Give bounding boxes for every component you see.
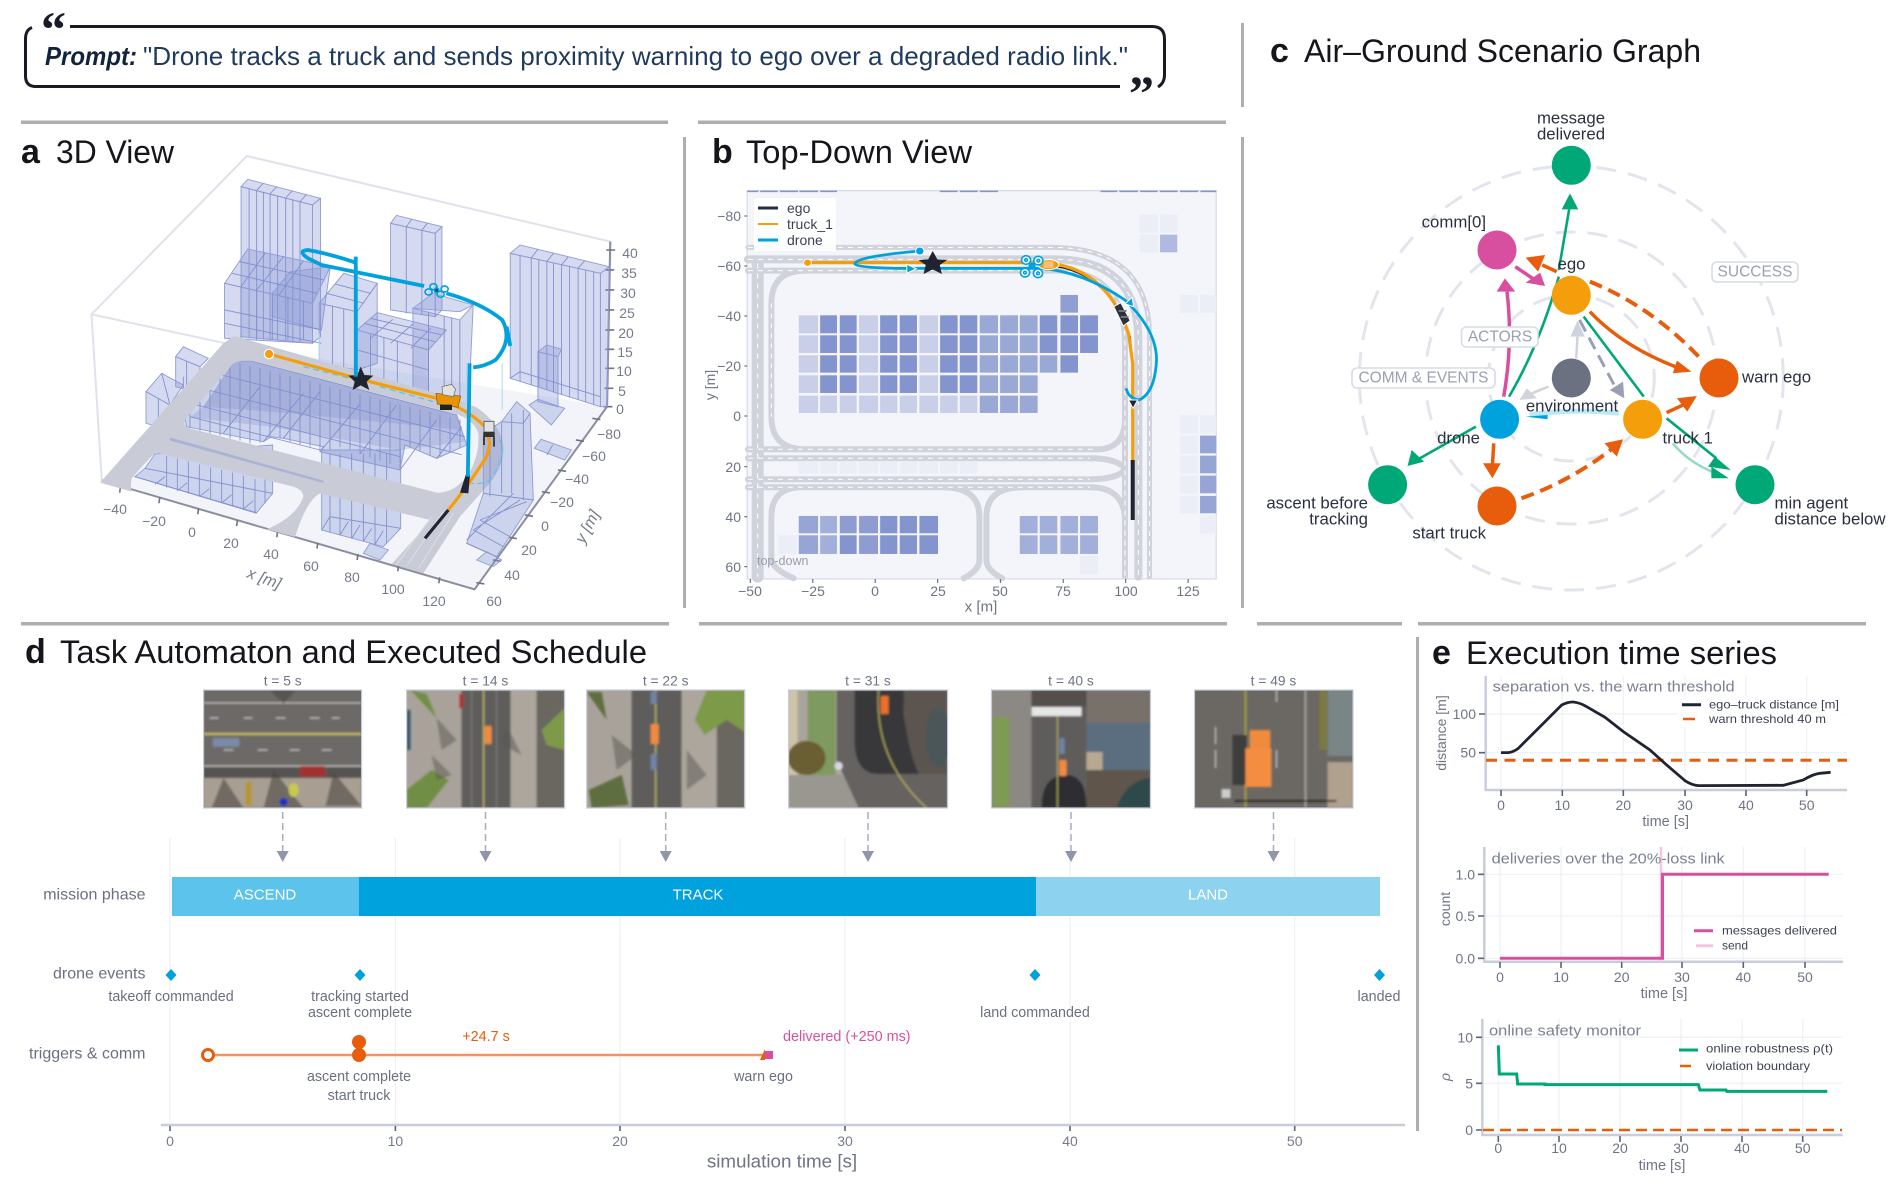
time axis: 40 [1062,1133,1078,1149]
chart: separation: 20 [1616,797,1631,813]
legend [1679,1042,1833,1073]
tick labels x: 100 [1114,583,1138,599]
legend [754,198,836,251]
right tower cluster [467,402,533,567]
chart: online safety monitor: 20 [1612,1140,1628,1156]
node labels: drone [1437,428,1480,448]
drone icon [425,284,448,297]
middle block [322,450,401,547]
axis tick labels z [616,245,638,417]
chart: online safety monitor: online safety monitor [1489,1022,1641,1040]
axis tick labels z: 30 [620,285,636,301]
legend [1694,924,1837,953]
node labels: start truck [1412,524,1487,542]
send marker [1660,847,1662,962]
node: min agent distance [1736,465,1774,504]
truck icon [1038,260,1059,270]
panel e: execution time series [1432,634,1847,1174]
axis tick labels x: −40 [103,501,127,517]
axis tick labels x [103,501,446,609]
axis tick labels z: 40 [622,245,638,261]
node labels [1266,108,1886,542]
start markers [804,247,924,266]
node: ego [1552,276,1591,315]
chart: deliveries: 1.0 [1456,866,1475,882]
prompt text: "Drone tracks a truck and sends proximity warning to ego over a degraded radio link." [143,41,1128,71]
lower-left block [135,445,273,513]
node: drone [1480,400,1519,439]
delivered step line [1500,874,1829,958]
heading d: Task Automaton and Executed Schedule [60,634,647,670]
legend: drone [787,232,823,248]
drone path [302,250,510,477]
chart: separation: 100 [1453,706,1476,722]
frame t=49: t = 49 s [1251,674,1296,688]
drone path [855,251,1157,400]
tick labels y: −60 [717,258,741,274]
frame borders [204,690,1353,808]
chart: separation: 10 [1555,797,1570,813]
node labels: min agent [1774,494,1849,512]
legend: ego [787,200,811,216]
mission phase bar [172,877,1380,916]
axis tick labels z: 35 [621,265,637,281]
axis tick labels z: 15 [617,344,633,360]
mission phase bar: ASCEND [234,886,296,904]
chart: deliveries [1437,847,1843,1002]
chart: online safety monitor: time [s] [1639,1158,1685,1174]
icon: opening quote: “ [41,1,66,57]
node labels: environment [1526,396,1619,416]
node: environment [1552,358,1591,398]
chart: deliveries: 20 [1614,969,1630,985]
chart: deliveries: 0.0 [1456,950,1475,966]
panel a: 3D view [21,133,638,609]
chart: separation: 50 [1460,745,1476,761]
node: warn ego [1700,358,1738,398]
chart: online safety monitor: 10 [1457,1029,1473,1045]
axis tick labels y: −20 [550,494,574,510]
legend [1678,697,1846,727]
frame t=14: t = 14 s [463,674,508,688]
legend: send [1722,939,1748,953]
axis tick labels z: 20 [618,325,634,341]
drone event labels: land commanded [980,1005,1090,1021]
tick labels y: −40 [717,308,741,324]
prompt callout [26,1,1164,121]
heading c: c [1270,32,1289,70]
tick labels y: 20 [725,459,741,475]
tick labels y [717,208,741,575]
gridlines [170,838,1295,1125]
chart: online safety monitor [1437,1019,1843,1174]
distance curve [1501,702,1831,786]
trigger timeline: warn ego [733,1069,793,1085]
chart: online safety monitor: 5 [1465,1075,1473,1091]
axis tick labels z: 5 [618,383,626,399]
axis tick labels y: −80 [597,426,621,442]
ego path [425,510,448,538]
tick labels y: 0 [733,408,741,424]
trigger timeline: start truck [328,1088,391,1104]
panel b: top-down view [702,133,1216,616]
time axis [161,1125,1405,1172]
node: truck 1 [1623,400,1662,439]
node labels: comm[0] [1422,212,1486,232]
frame t=22 [587,674,745,808]
tick labels x: 50 [992,583,1008,599]
tick labels x: 75 [1055,583,1071,599]
row label: drone events: drone events [53,966,146,982]
frame t=5 [204,674,362,808]
legend: ego–truck distance [m] [1709,698,1839,712]
axis tick labels x: 20 [223,535,239,551]
node: message delivered [1552,146,1591,185]
drone event labels [108,989,1401,1021]
heading d: d [25,633,46,671]
ring chip: comm and events: COMM & EVENTS [1358,370,1489,386]
icon: closing quote: ” [1129,65,1154,121]
tick labels x: −25 [801,583,825,599]
axis tick labels y: 60 [486,593,502,609]
chart: online safety monitor: 0 [1465,1122,1473,1138]
trigger timeline [202,1029,911,1104]
x axis title: x [m] [244,565,284,593]
interior block buildings [185,361,467,470]
ego car icon [483,421,495,447]
chart: separation [1433,676,1847,830]
chart: separation: 0 [1497,797,1505,813]
heading a: 3D View [56,134,175,170]
heading e: e [1432,634,1451,672]
chart: deliveries: 0 [1496,969,1504,985]
frame t=40 [992,674,1150,808]
start marker [264,349,274,359]
time axis: 10 [388,1133,403,1149]
heading b: b [712,133,733,171]
time axis: 20 [612,1133,628,1149]
drone event markers [166,969,1385,981]
drone event labels: ascent complete [308,1005,412,1021]
node labels: distance below [1774,510,1886,528]
chart: deliveries: 0.5 [1456,908,1475,924]
top-down map [744,191,1216,583]
ring chip: actors: ACTORS [1468,328,1532,346]
frame t=49 [1194,674,1354,808]
axis tick labels x: 100 [381,581,405,597]
ego arrow [460,474,470,493]
chart: separation: separation vs. the warn threshold [1493,678,1735,696]
axis tick labels z: 25 [619,305,635,321]
chart: deliveries: 40 [1736,969,1751,985]
axis tick labels y: −60 [582,448,606,464]
axis tick labels y: 20 [521,542,537,558]
star marker [348,367,373,390]
x axis title: x [m] [965,598,997,616]
tick labels x: −50 [738,583,762,599]
axis tick labels y: 0 [541,518,549,534]
legend: truck_1 [787,216,833,232]
tick labels x: 0 [871,583,879,599]
frame t=31 [788,674,952,808]
frame t=40: t = 40 s [1048,674,1094,688]
orbit rings [1359,166,1783,590]
panel c: scenario graph [1266,32,1886,590]
axis tick labels y: −40 [565,471,589,487]
axis tick labels x: 120 [422,593,446,609]
frame t=14 [407,674,565,808]
violation boundary [1483,1129,1842,1131]
y axis title: y [m] [702,370,718,400]
ego car icon [1114,303,1130,326]
graph edges [1408,193,1731,498]
axes box and tower blocks [92,156,615,589]
time axis: simulation time [s] [707,1150,857,1172]
axis tick labels z: 10 [616,363,632,379]
frame t=22: t = 22 s [643,674,689,688]
robustness line [1498,1045,1827,1091]
chart: online safety monitor: 30 [1673,1140,1689,1156]
chart: online safety monitor: ρ [1437,1073,1453,1082]
tick labels x: 125 [1176,583,1200,599]
ground layer [100,336,533,573]
axis tick labels x: 60 [303,558,319,574]
axis tick labels y [486,426,621,609]
arrows from frames to timeline [277,812,1280,862]
row label: mission phase: mission phase [43,886,146,904]
frame t=5: t = 5 s [264,674,302,688]
chart: separation: distance [m] [1433,695,1449,771]
chart: separation: time [s] [1642,814,1689,830]
row label: triggers and comm: triggers & comm [29,1046,146,1062]
chart: deliveries: 10 [1553,969,1569,985]
tick labels x [738,583,1200,599]
axis tick labels x: 40 [263,546,279,562]
node: start truck [1478,486,1516,526]
drone event labels: takeoff commanded [108,989,234,1005]
node labels: warn ego [1741,368,1811,386]
road network [100,336,503,573]
chart: separation: 30 [1677,797,1693,813]
trigger timeline: +24.7 s [462,1029,510,1045]
node labels: truck 1 [1662,428,1713,448]
truck path [808,263,1133,460]
node: comm [1478,230,1516,270]
legend: messages delivered [1722,924,1837,938]
axis tick labels x: 0 [188,524,196,540]
3D scene [92,156,615,589]
node labels: delivered [1537,124,1605,144]
chart: deliveries: time [s] [1641,986,1687,1002]
drone icon [1020,256,1043,278]
legend: online robustness ρ(t) [1706,1042,1833,1056]
time axis: 50 [1287,1133,1303,1149]
legend: warn threshold 40 m [1708,712,1826,726]
heading c: Air–Ground Scenario Graph [1304,33,1701,69]
legend: violation boundary [1706,1059,1810,1073]
heading a: a [21,133,41,171]
map watermark: top-down [757,554,808,568]
road network [748,247,1150,578]
drone event labels: tracking started [311,989,409,1005]
mission phase bar: LAND [1188,886,1228,904]
threshold line [1486,759,1847,762]
small block front [363,543,388,560]
chart: deliveries: count [1437,892,1453,926]
small blocks left [146,347,208,430]
axis tick labels x: 80 [344,569,360,585]
time axis: 0 [166,1133,174,1149]
tick labels y: −80 [717,208,741,224]
time axis: 30 [837,1133,853,1149]
tick labels y: 40 [725,509,741,525]
ring chip: success: SUCCESS [1718,264,1792,280]
frame t=31: t = 31 s [845,674,891,688]
ego path [1041,265,1133,463]
building footprints [747,191,1216,574]
ego path lower segment [1131,460,1135,520]
truck path [269,354,490,510]
drone event labels: landed [1358,989,1401,1005]
node labels: ego [1558,254,1586,274]
node labels: tracking [1309,510,1368,528]
chart: online safety monitor: 10 [1551,1140,1567,1156]
chart: online safety monitor: 0 [1494,1140,1502,1156]
chart: separation: 50 [1799,797,1815,813]
axis tick labels z: 0 [616,401,624,417]
tick labels y: −20 [717,358,741,374]
heading b: Top-Down View [746,134,973,170]
axis tick labels x: −20 [142,513,166,529]
tick labels y: 60 [725,559,741,575]
chart: deliveries: 50 [1797,969,1813,985]
chart: online safety monitor: 50 [1795,1140,1811,1156]
chart: separation: 40 [1738,797,1754,813]
chart: online safety monitor: 40 [1734,1140,1750,1156]
trigger timeline: delivered (+250 ms) [783,1029,911,1045]
prompt label: Prompt: [45,41,137,71]
star marker [918,251,947,274]
node: ascent before tracking [1368,465,1407,504]
chart: deliveries: deliveries over the 20%-loss link [1492,850,1725,868]
node labels: message [1537,108,1605,128]
node labels: ascent before [1266,494,1368,512]
truck icon [436,384,461,410]
road details [170,437,453,569]
tick labels x: 25 [930,583,946,599]
axis tick labels y: 40 [504,567,520,583]
y axis title: y [m] [572,507,604,547]
mission phase bar: TRACK [673,886,723,904]
drone ground shadow [303,367,502,484]
chart: deliveries: 30 [1674,969,1690,985]
direction arrows [907,264,1138,408]
heading e: Execution time series [1466,635,1777,671]
trigger timeline: ascent complete [307,1069,411,1085]
panel d: task automaton and schedule [25,633,1405,1172]
